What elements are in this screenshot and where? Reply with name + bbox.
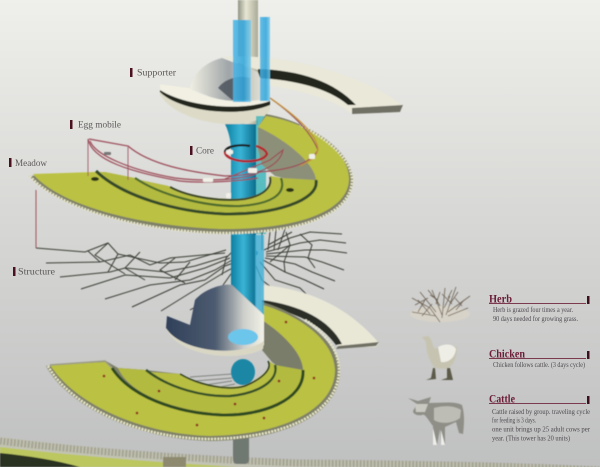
egg mobile vehicles (104, 150, 315, 198)
label: Meadow: Meadow (15, 159, 47, 169)
structure (36, 229, 347, 311)
legend: Chicken: Chicken follows cattle. (3 days cycle) (493, 361, 586, 369)
icon: chicken (422, 336, 457, 380)
legend: Chicken (489, 346, 590, 369)
core ring (225, 145, 267, 161)
legend: Cattle: one unit brings up 25 adult cows per (492, 426, 591, 434)
lower hub (231, 359, 255, 385)
lower supporter front disc (166, 285, 264, 356)
main pole (238, 0, 258, 125)
label: Egg mobile: Egg mobile (78, 120, 121, 130)
label: Core: Core (196, 146, 214, 156)
lower meadow (46, 302, 340, 441)
supporter back crescent (222, 56, 403, 114)
bottom deck (0, 437, 600, 467)
blue tubes upper (233, 17, 270, 102)
legend: Cattle (489, 392, 591, 442)
icon: herb bush (410, 287, 470, 322)
legend: Cattle: Cattle (489, 392, 516, 406)
upper meadow (29, 114, 353, 234)
icon: cow (408, 397, 464, 445)
label: Supporter: Supporter (137, 68, 177, 78)
legend: Herb: 90 days needed for growing grass. (493, 315, 578, 323)
meadow leader (35, 190, 37, 248)
legend: Herb (489, 292, 590, 323)
legend: Cattle: year. (This tower has 20 units) (492, 434, 571, 442)
core shaft (225, 116, 266, 240)
lower pole (233, 432, 249, 464)
egg mobile track (88, 98, 318, 182)
structure hub (232, 248, 258, 258)
lower fan under meadow (190, 374, 235, 388)
legend: Chicken: Chicken (489, 346, 525, 360)
lower supporter back crescent (262, 285, 379, 349)
supporter front disc (160, 58, 270, 124)
legend: Herb: Herb is grazed four times a year. (493, 306, 573, 314)
legend: Cattle: for feeding is 3 days. (492, 416, 536, 424)
legend: Herb: Herb (489, 292, 512, 306)
lower core (231, 235, 264, 340)
legend: Cattle: Cattle raised by group. traveling cycle (492, 408, 590, 416)
label: Structure: Structure (18, 268, 55, 278)
